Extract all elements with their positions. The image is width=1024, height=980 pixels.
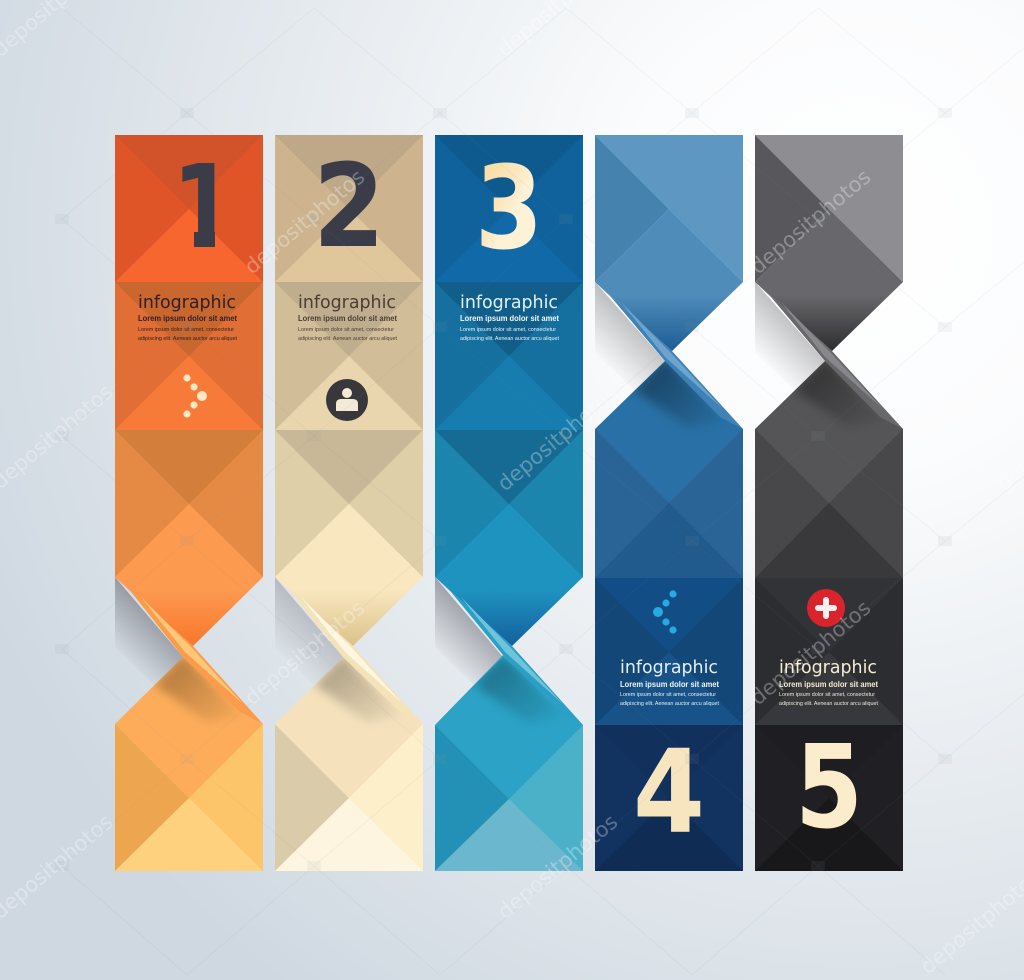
panel: column 5 charcoal	[755, 135, 903, 871]
body text	[460, 327, 559, 342]
fold strip	[275, 577, 423, 724]
cell 4 top triangle	[755, 725, 903, 798]
cell 2 sides	[275, 282, 423, 430]
cell 2 top triangle	[275, 282, 423, 356]
cell 3 top triangle	[755, 578, 903, 652]
watermarks: depositphotos	[746, 165, 875, 279]
watermarks: depositphotos	[493, 382, 622, 496]
heading: infographic	[298, 292, 396, 313]
body text: adipiscing elit. Aenean auctor arcu aliquet	[620, 701, 719, 707]
body text	[138, 327, 237, 342]
body text: adipiscing elit. Aenean auctor arcu aliquet	[460, 336, 559, 342]
cell 2 bottom triangle	[755, 503, 903, 578]
panel: column 2 beige	[275, 135, 423, 871]
cell 3 sides	[755, 578, 903, 725]
fold inner shadow	[796, 361, 868, 423]
cell 3 bottom triangle	[755, 652, 903, 725]
cell 2 bottom triangle	[435, 356, 583, 430]
body text: Lorem ipsum dolor sit amet, consectetur	[620, 692, 716, 698]
watermarks: depositphotos	[240, 596, 369, 710]
cell 1 sides	[275, 135, 423, 282]
bottom shadow on background	[435, 577, 503, 686]
heading: infographic	[138, 292, 236, 313]
cell 2 top triangle	[435, 282, 583, 356]
cell 2 sides	[595, 429, 743, 578]
cell 3 sides	[115, 430, 263, 577]
top block left triangle	[755, 135, 829, 282]
bottom shadow on background	[755, 282, 825, 391]
body text	[298, 327, 397, 342]
top block	[595, 135, 743, 282]
fold inner shadow	[474, 657, 553, 722]
number 4: 4	[633, 726, 705, 860]
icon: person in circle	[326, 379, 368, 421]
body text: Lorem ipsum dolor sit amet, consectetur	[138, 327, 234, 333]
number 1: 1	[172, 141, 236, 275]
body text	[620, 692, 719, 707]
fold inner shadow	[634, 361, 715, 427]
watermarks: depositphotos	[240, 165, 369, 279]
cell 1 top triangle	[115, 135, 263, 209]
lower bottom triangle	[435, 799, 583, 871]
subheading: Lorem ipsum dolor sit amet	[298, 314, 397, 323]
top block	[755, 135, 903, 282]
body text: Lorem ipsum dolor sit amet, consectetur	[298, 327, 394, 333]
cell 4 bottom triangle	[755, 798, 903, 871]
lower block sides	[115, 724, 263, 871]
bottom shadow on background	[275, 577, 343, 686]
cell 3 top triangle	[595, 578, 743, 652]
cell 2 bottom triangle	[115, 356, 263, 430]
fold highlight	[300, 596, 403, 704]
watermarks: depositphotos	[746, 596, 875, 710]
watermark camera marks	[55, 108, 952, 871]
cell 3 sides	[595, 578, 743, 725]
lower block sides	[435, 725, 583, 871]
bottom shadow on background	[595, 282, 665, 391]
cell 2 sides	[115, 282, 263, 430]
cell 1 sides	[115, 135, 263, 282]
fold inner shadow	[315, 655, 403, 722]
lower block sides	[275, 724, 423, 871]
icon: dotted chevron	[183, 374, 207, 418]
top block left triangle	[595, 135, 669, 282]
cell 2 sides	[435, 282, 583, 430]
lower bottom triangle	[275, 798, 423, 871]
cell 2 top triangle	[115, 282, 263, 356]
subheading: Lorem ipsum dolor sit amet	[138, 314, 237, 323]
cell 3 sides	[435, 430, 583, 577]
cell 4 bottom triangle	[595, 798, 743, 871]
panel: column 1 orange	[115, 135, 263, 871]
cell 3 top triangle	[275, 430, 423, 504]
upper point	[115, 504, 263, 646]
cell 1 top triangle	[435, 135, 583, 209]
subheading: Lorem ipsum dolor sit amet	[620, 680, 719, 689]
number 5: 5	[795, 721, 863, 855]
cell 3 top triangle	[435, 430, 583, 504]
fold strip	[435, 577, 583, 725]
number 2: 2	[313, 140, 385, 274]
upper point	[755, 209, 903, 351]
lower bottom triangle	[115, 798, 263, 871]
cell 4 sides	[595, 725, 743, 871]
panel: column 3 teal blue	[435, 135, 583, 871]
fold highlight	[780, 301, 883, 409]
fold strip	[115, 577, 263, 724]
icon: red plus	[807, 589, 845, 627]
watermarks: depositphotos	[493, 810, 622, 924]
subheading: Lorem ipsum dolor sit amet	[460, 314, 559, 323]
body text: Lorem ipsum dolor sit amet, consectetur	[779, 692, 875, 698]
heading: infographic	[620, 657, 718, 678]
lower diamond	[115, 657, 263, 798]
lower diamond	[755, 361, 903, 503]
fold highlight	[620, 301, 723, 409]
body text	[779, 692, 878, 707]
cell 2 bottom triangle	[595, 503, 743, 578]
cell 1 top triangle	[275, 135, 423, 209]
fold highlight	[140, 596, 243, 704]
lower diamond	[275, 657, 423, 798]
cell 4 sides	[755, 725, 903, 871]
cell 1 bottom triangle	[115, 209, 263, 282]
cell 1 sides	[435, 135, 583, 282]
subheading: Lorem ipsum dolor sit amet	[779, 680, 878, 689]
upper point	[595, 209, 743, 351]
upper point	[275, 504, 423, 646]
panel: column 4 navy blue	[595, 135, 743, 871]
fold inner shadow	[155, 655, 243, 722]
heading: infographic	[460, 292, 558, 313]
body text: adipiscing elit. Aenean auctor arcu aliquet	[138, 336, 237, 342]
fold strip	[755, 282, 903, 429]
cell 2 bottom triangle	[275, 356, 423, 430]
number 3: 3	[475, 142, 543, 276]
body text: adipiscing elit. Aenean auctor arcu aliquet	[298, 336, 397, 342]
cell 3 bottom triangle	[595, 652, 743, 725]
body text: Lorem ipsum dolor sit amet, consectetur	[460, 327, 556, 333]
cell 4 top triangle	[595, 725, 743, 798]
cell 2 sides	[755, 429, 903, 578]
body text: adipiscing elit. Aenean auctor arcu aliquet	[779, 701, 878, 707]
cell 1 bottom triangle	[435, 209, 583, 282]
fold strip	[595, 282, 743, 429]
bottom shadow on background	[115, 577, 183, 686]
cell 3 top triangle	[115, 430, 263, 504]
upper point	[435, 504, 583, 646]
icon: dotted chevron	[653, 590, 677, 634]
cell 1 bottom triangle	[275, 209, 423, 282]
lower diamond	[595, 361, 743, 503]
heading: infographic	[779, 657, 877, 678]
cell 3 sides	[275, 430, 423, 577]
lower diamond	[435, 655, 583, 799]
fold highlight	[460, 596, 563, 704]
